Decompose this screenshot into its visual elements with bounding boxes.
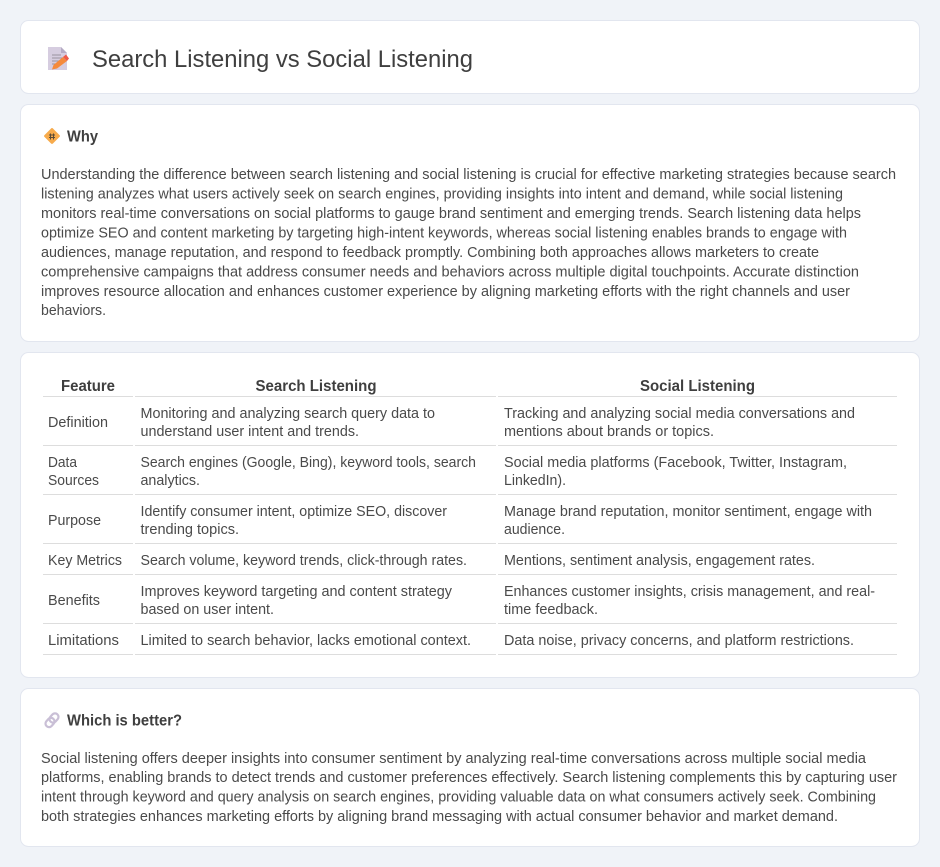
panel: why	[20, 104, 920, 342]
table row: definition: Tracking and analyzing social media conversations and	[504, 406, 855, 422]
panel: which is better	[20, 688, 920, 846]
text block: which is better paragraph: Social listening offers deeper insights into consumer sentiment by analyzing real-time conversations across multiple social media	[41, 751, 866, 767]
table row: benefits: Benefits	[48, 593, 100, 609]
heading: which is better: Which is better?	[67, 712, 182, 730]
table row: purpose: Purpose	[48, 513, 101, 529]
text block: why paragraph: audiences, manage reputation, and respond to feedback promptly. Combining both approaches allows marketers to create	[41, 245, 819, 261]
table row: definition: Monitoring and analyzing search query data to	[140, 406, 435, 422]
heading: why: Why	[67, 128, 98, 146]
table row: limitations: Data noise, privacy concerns, and platform restrictions.	[504, 633, 854, 649]
table row: data sources: Sources	[48, 473, 99, 489]
table row: key metrics: Mentions, sentiment analysis, engagement rates.	[504, 553, 815, 569]
text block: why paragraph: improves resource allocation and enhances customer experience by aligning marketing efforts with the right channels and user	[41, 284, 850, 300]
table row: definition: Definition	[48, 415, 108, 431]
table row: benefits: time feedback.	[504, 602, 598, 618]
text block: which is better paragraph: platforms, enabling brands to detect trends and customer preferences effectively. Search listening complements this by capturing user	[41, 770, 897, 786]
table row: purpose: Manage brand reputation, monitor sentiment, engage with	[504, 504, 872, 520]
table row: definition: mentions about brands or topics.	[504, 424, 714, 440]
icon: warning diamond	[44, 128, 60, 144]
text block: which is better paragraph: both strategies enhances marketing efforts by aligning brand messaging with actual consumer behavior and market demand.	[41, 809, 838, 825]
table header row: Search Listening	[256, 378, 376, 395]
table row: benefits: Enhances customer insights, crisis management, and real-	[504, 584, 875, 600]
table row: benefits: Improves keyword targeting and content strategy	[140, 584, 453, 600]
table row: purpose: trending topics.	[140, 522, 239, 538]
icon: link	[44, 712, 60, 729]
table row: benefits: based on user intent.	[140, 602, 274, 618]
text block: why paragraph	[41, 167, 896, 319]
text block: why paragraph: listening analyzes what users actively seek on search engines, providing insights into intent and demand, while social listening	[41, 186, 843, 202]
table row: purpose	[43, 504, 897, 544]
table row: key metrics: Search volume, keyword trends, click-through rates.	[140, 553, 467, 569]
table row: limitations: Limited to search behavior, lacks emotional context.	[140, 633, 471, 649]
table header row: Social Listening	[640, 378, 755, 395]
table row: key metrics	[43, 553, 897, 574]
table row: key metrics: Key Metrics	[48, 553, 122, 569]
table row: definition: understand user intent and trends.	[140, 424, 359, 440]
table row: data sources: analytics.	[140, 473, 200, 489]
panel: title header	[20, 20, 920, 94]
text block: which is better paragraph	[41, 751, 897, 825]
table row: data sources: Search engines (Google, Bing), keyword tools, search	[140, 455, 476, 471]
table header row: Feature	[61, 378, 115, 395]
title: Search Listening vs Social Listening	[92, 46, 473, 73]
icon: memo with pencil	[48, 47, 69, 70]
table row: data sources: Data	[48, 455, 77, 471]
table row: limitations: Limitations	[48, 633, 119, 649]
text block: why paragraph: monitors real-time conversations on social platforms to gauge brand sentiment and emerging trends. Search listening data helps	[41, 206, 861, 222]
panel: comparison table	[20, 352, 920, 678]
table row: data sources	[43, 455, 897, 494]
text block: why paragraph: Understanding the difference between search listening and social listening is crucial for effective marketing strategies because search	[41, 167, 896, 183]
table row: benefits	[43, 584, 897, 624]
table row: data sources: Social media platforms (Facebook, Twitter, Instagram,	[504, 455, 847, 471]
table row: purpose: Identify consumer intent, optimize SEO, discover	[140, 504, 447, 520]
text block: why paragraph: comprehensive campaigns that address consumer needs and behaviors across multiple digital touchpoints. Accurate distinction	[41, 264, 859, 280]
text block: which is better paragraph: intent through keyword and query analysis on search engines, providing valuable data on what consumers actively seek. Combining	[41, 790, 876, 806]
table row: definition	[43, 406, 897, 446]
table row: limitations	[43, 633, 897, 654]
text block: why paragraph: behaviors.	[41, 303, 106, 319]
table header row	[43, 378, 897, 396]
text block: why paragraph: optimize SEO and content marketing by targeting high-intent keywords, whereas social listening enables brands to engage with	[41, 226, 847, 242]
table row: purpose: audience.	[504, 522, 565, 538]
table row: data sources: LinkedIn).	[504, 473, 566, 489]
